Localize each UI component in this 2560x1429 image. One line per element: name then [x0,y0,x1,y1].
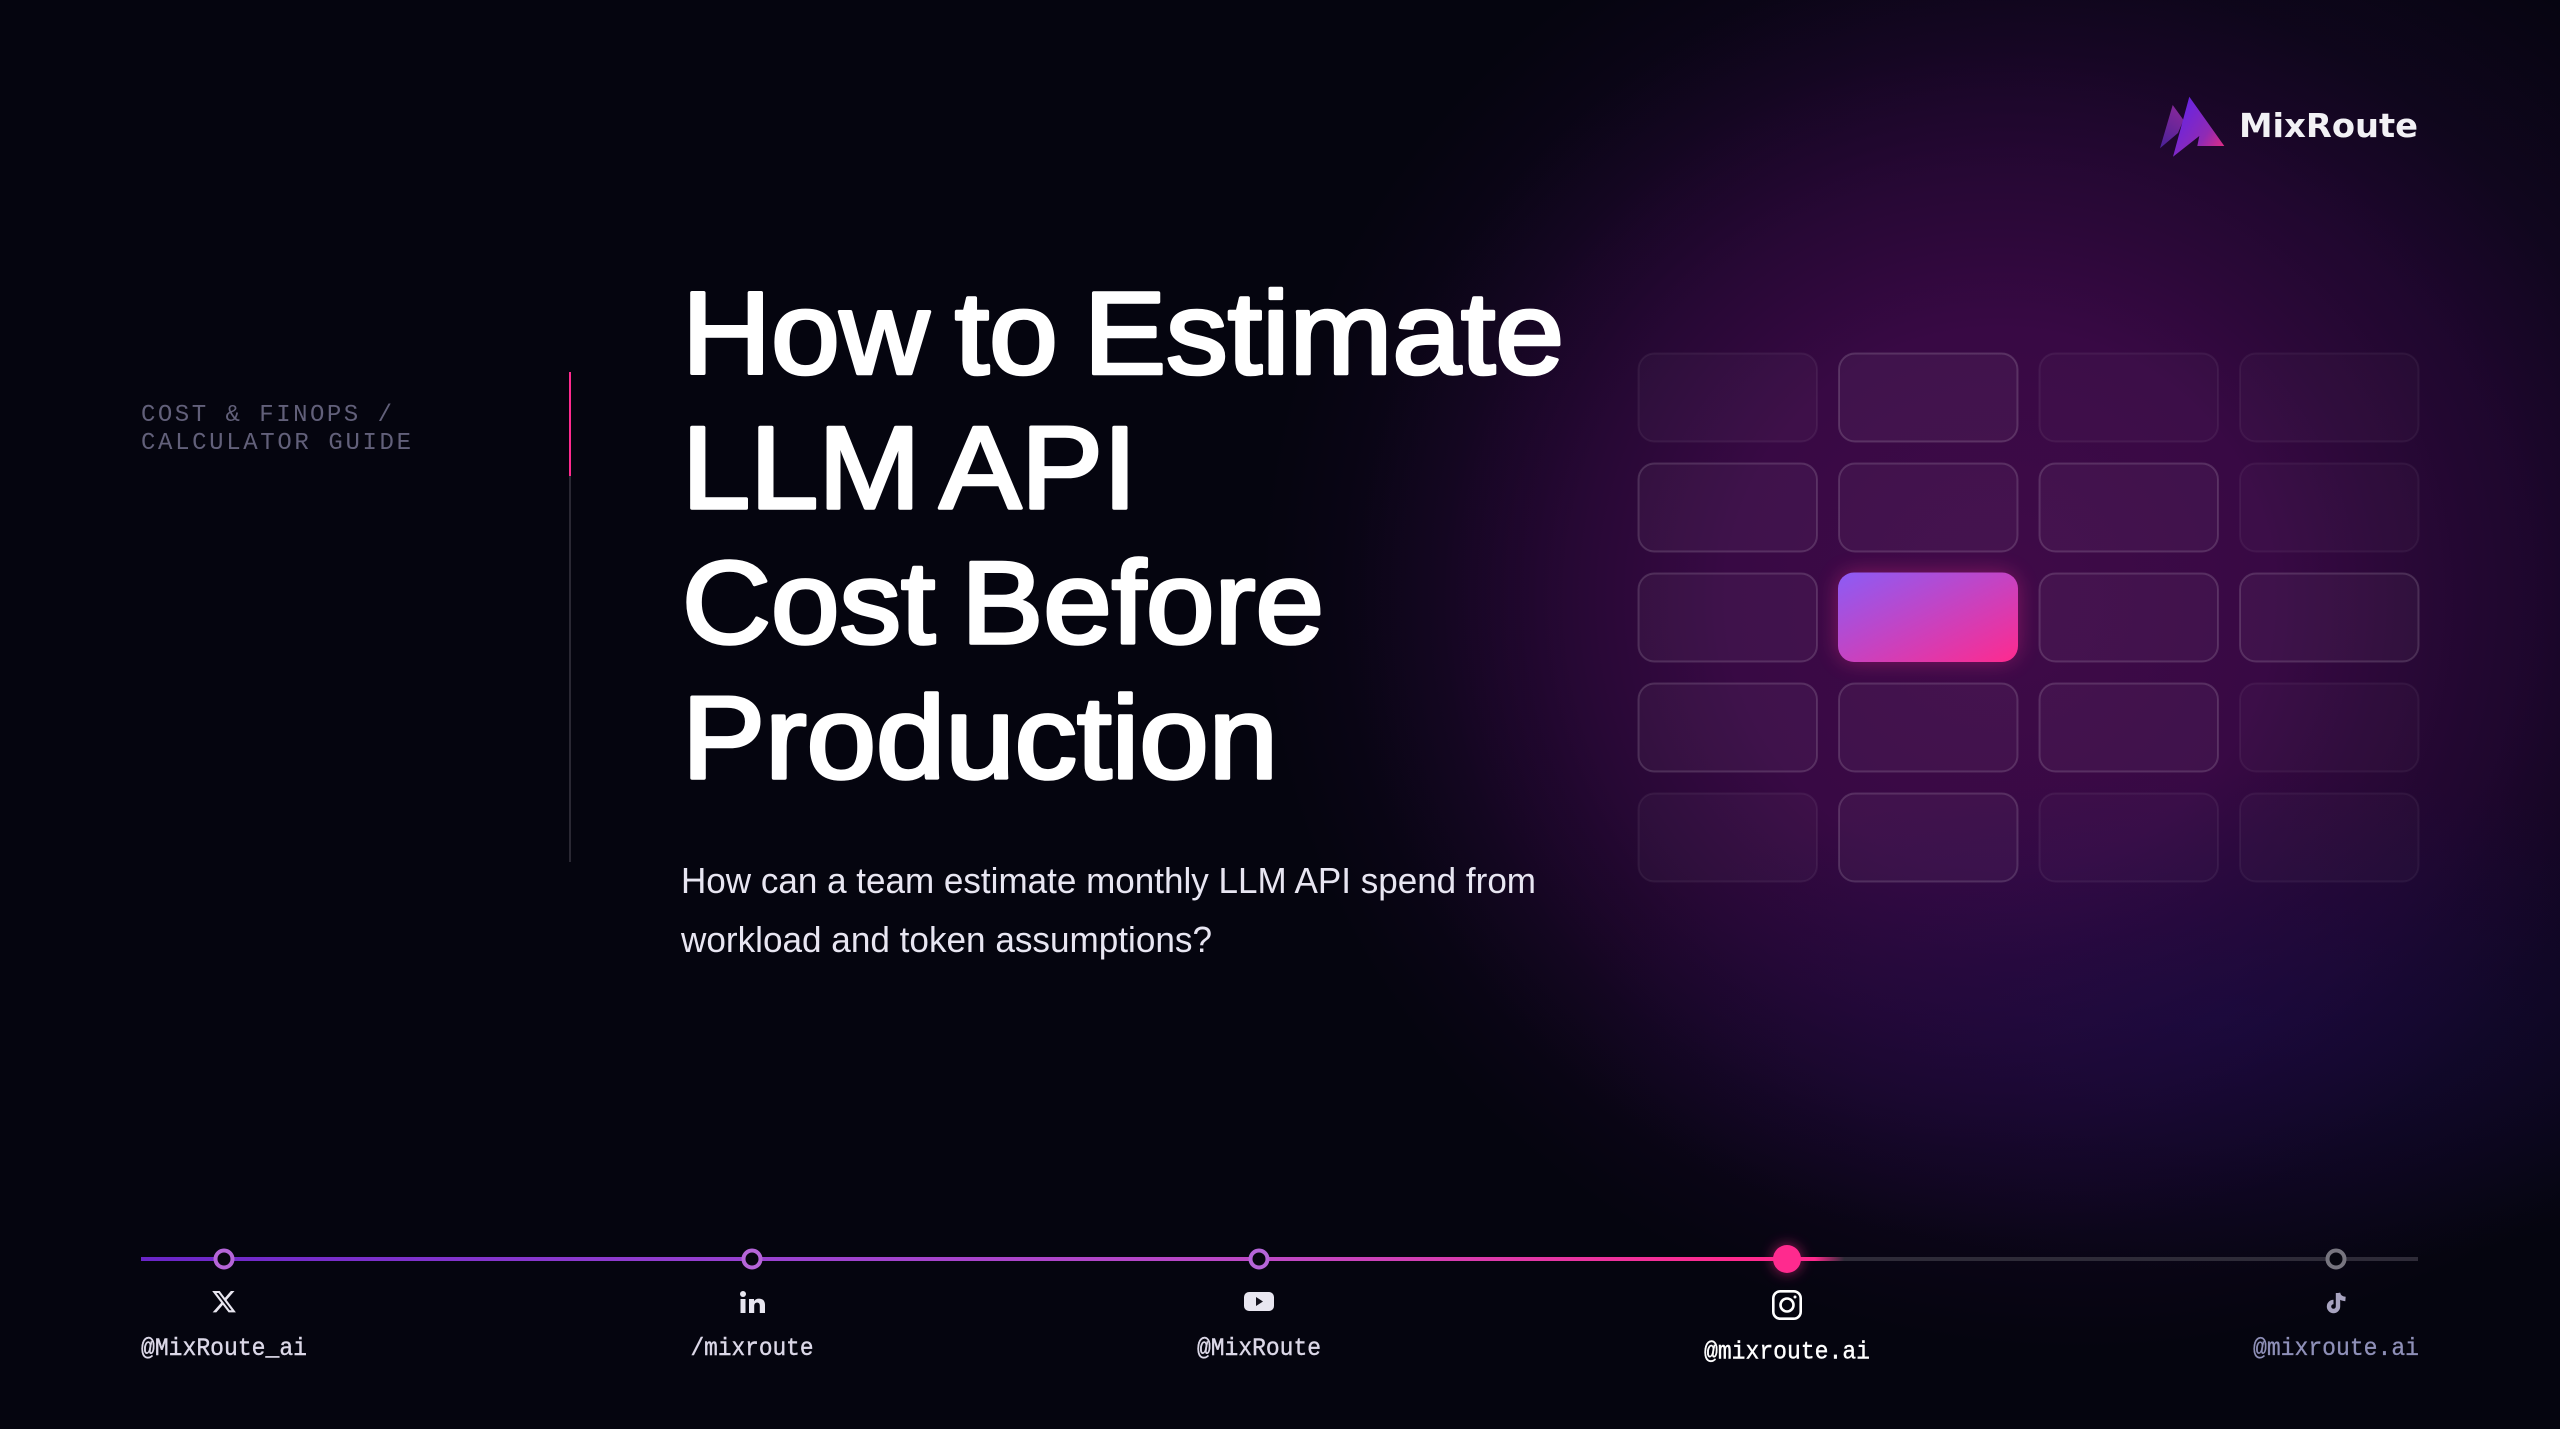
row 5 [1638,794,2418,882]
channel: X [141,1250,307,1363]
logo: MixRoute [2160,97,2418,157]
title: LLM API [682,402,1137,533]
timeline of social channels [141,1245,2419,1366]
category label: CALCULATOR GUIDE [141,430,411,457]
vertical progress rule [569,372,571,862]
channel: LinkedIn [690,1250,814,1363]
logo wordmark: MixRoute [2239,106,2418,145]
category label: COST & FINOPS / [141,402,392,429]
channel: LinkedIn: /mixroute [690,1334,814,1363]
icon: LinkedIn [740,1291,765,1313]
channel: TikTok [2253,1250,2419,1363]
subtitle [680,860,1536,960]
glow behind active card [1838,573,2017,661]
row 2 [1638,464,2418,552]
category label [141,402,411,457]
timeline line [141,1257,2418,1261]
channel: TikTok: @mixroute.ai [2253,1334,2419,1363]
channel: Instagram (active) [1704,1245,1870,1366]
channel: YouTube: @MixRoute [1197,1334,1321,1363]
title [682,268,1564,803]
row 1 [1638,354,2418,442]
title: How to Estimate [682,268,1564,398]
row 3 [1638,572,2418,662]
channel: X: @MixRoute_ai [141,1334,307,1363]
icon: YouTube [1244,1292,1274,1311]
icon: logo mark [2160,97,2224,157]
icon: Instagram [1773,1291,1801,1319]
subtitle: How can a team estimate monthly LLM API spend from [681,860,1536,901]
icon: TikTok [2329,1293,2346,1311]
panel: card grid [1638,354,2418,882]
active card [1838,572,2018,662]
row 4 [1638,684,2418,772]
channel: Instagram (active): @mixroute.ai [1704,1338,1870,1366]
title: Production [682,672,1278,803]
subtitle: workload and token assumptions? [680,919,1212,960]
channel: YouTube [1197,1250,1321,1363]
icon: X [212,1291,236,1312]
title: Cost Before [682,537,1324,668]
